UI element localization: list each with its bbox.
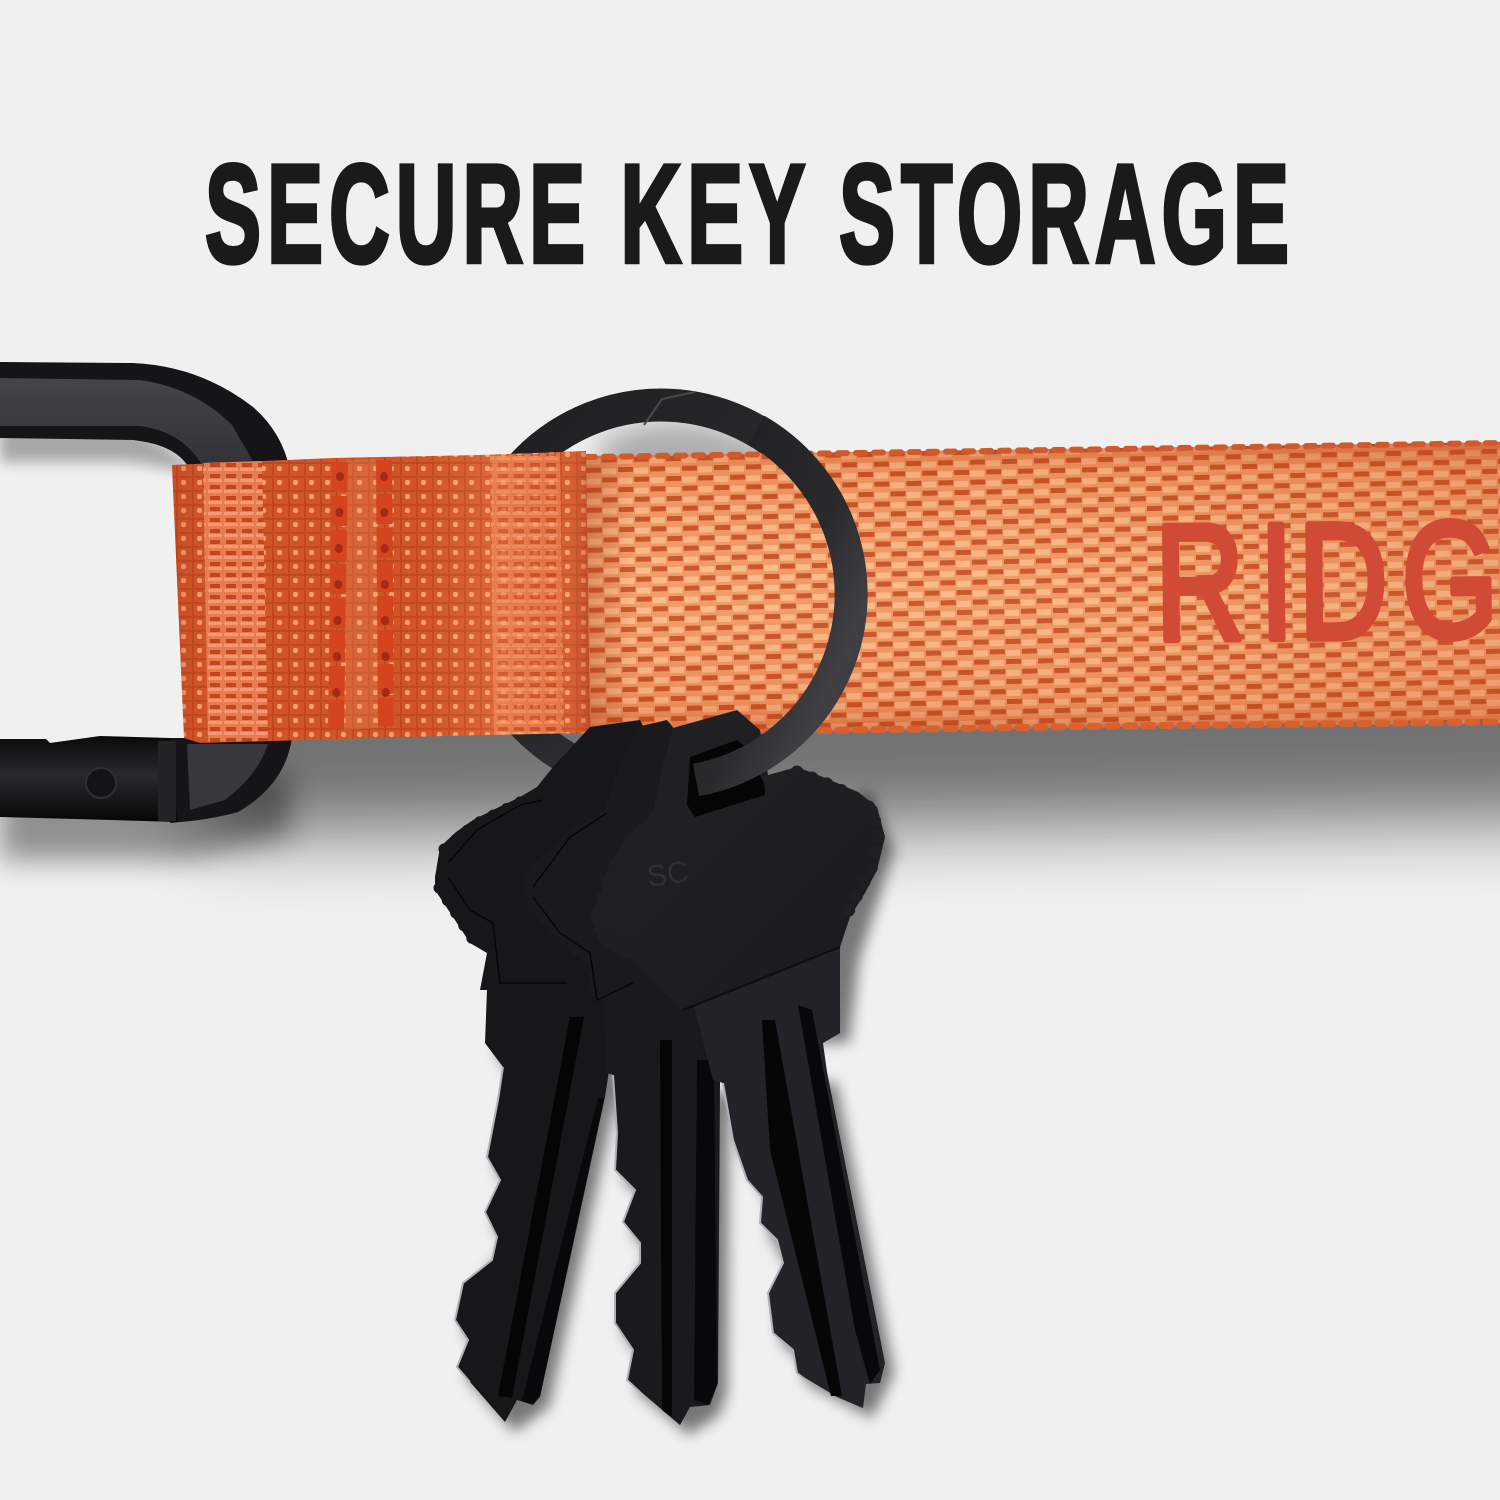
loop: central ribbed highlight — [203, 461, 268, 742]
cast shadows — [0, 422, 1500, 860]
key 3: stamped code: SC — [645, 855, 691, 894]
key 3: hole — [687, 740, 765, 817]
stitch line 1 — [336, 462, 340, 728]
carabiner: gate collar — [158, 741, 176, 821]
carabiner — [0, 362, 292, 823]
key 3: teeth edge — [723, 1083, 810, 1383]
carabiner: gate rod — [0, 736, 178, 822]
keys group — [435, 710, 894, 1435]
carabiner: gate pin — [86, 768, 116, 798]
key 1: back — [435, 720, 660, 1422]
strap: main webbing — [586, 442, 1500, 735]
split ring: gap notch — [644, 392, 695, 425]
carabiner: lower body plate — [170, 738, 292, 823]
logo text on strap: RIDG — [1154, 487, 1499, 675]
loop: ribbed fold near ring — [490, 453, 564, 735]
key shadow — [464, 790, 894, 1435]
carabiner: top arm — [0, 362, 290, 470]
split ring: back — [472, 405, 850, 783]
key 3: shoulder line — [683, 947, 840, 1010]
key 3: scalloped head edge — [597, 772, 878, 954]
key 3: head — [590, 710, 885, 1010]
key 3: front — [590, 710, 885, 1408]
key 2: middle — [523, 720, 720, 1425]
band between stitches — [344, 459, 378, 730]
strap: stitched loop — [172, 451, 590, 743]
stitch line 2 — [384, 460, 386, 726]
split ring: front arc over strap and key — [696, 430, 851, 780]
key 1: teeth edge — [455, 1067, 503, 1382]
key 2: teeth edge — [613, 1075, 640, 1392]
key 3: blade — [690, 930, 885, 1408]
